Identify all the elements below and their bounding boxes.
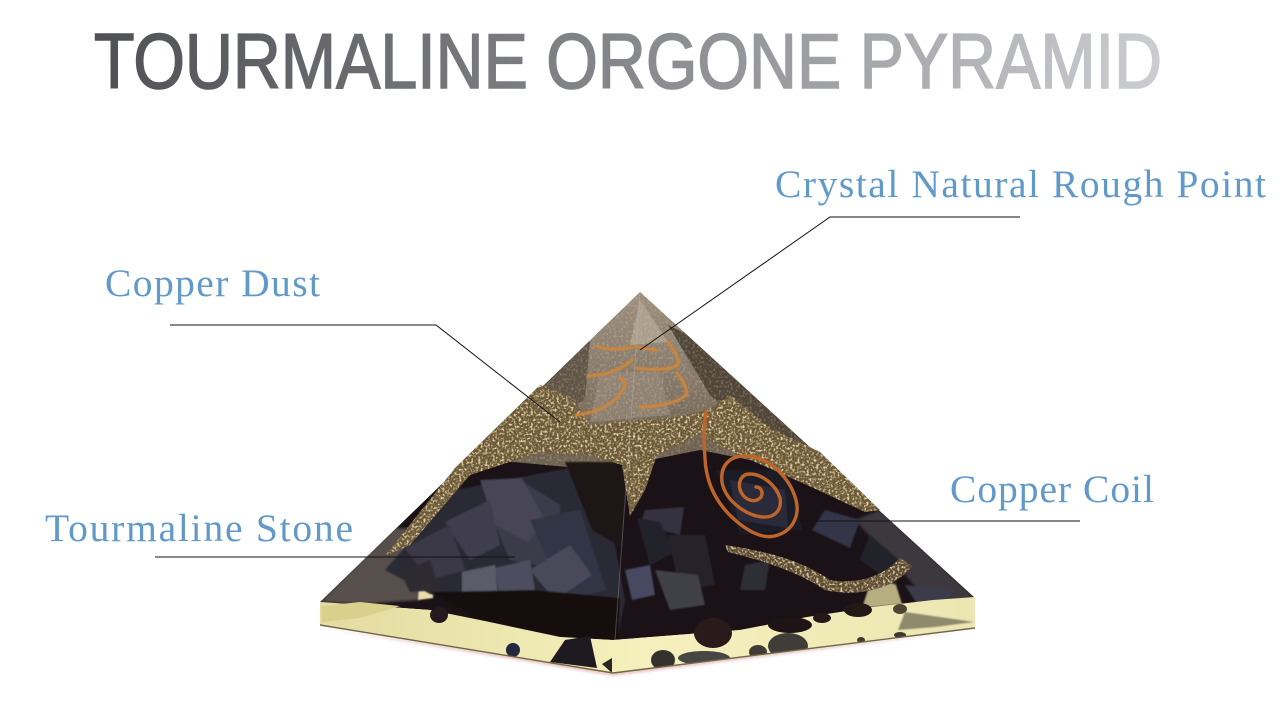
tourmaline stones left — [385, 462, 627, 640]
icon: copper tree coil — [576, 342, 687, 415]
rim bottom edges — [320, 625, 975, 673]
icon: copper spiral coil — [704, 412, 797, 537]
clear corner left — [320, 526, 420, 604]
pyramid photograph — [320, 292, 975, 676]
callout: Tourmaline Stone: Tourmaline Stone — [45, 506, 353, 550]
dark resin body — [320, 292, 975, 640]
callout: Crystal Natural Rough Point: Crystal Natural Rough Point — [775, 162, 1266, 206]
clear resin base rim — [320, 597, 975, 673]
clear corner right — [855, 510, 975, 603]
tourmaline stones right — [625, 470, 905, 610]
callout: Copper Dust — [105, 261, 560, 422]
callout: Crystal Natural Rough Point — [640, 162, 1266, 350]
pyramid centre edge — [615, 292, 640, 640]
callout: Copper Dust: Copper Dust — [105, 261, 320, 305]
copper dust band — [385, 385, 880, 556]
callout: Copper Coil: Copper Coil — [950, 467, 1154, 511]
copper dust swirl lower right — [725, 545, 912, 593]
crystal upper section — [510, 292, 810, 467]
base shadow — [322, 628, 975, 676]
